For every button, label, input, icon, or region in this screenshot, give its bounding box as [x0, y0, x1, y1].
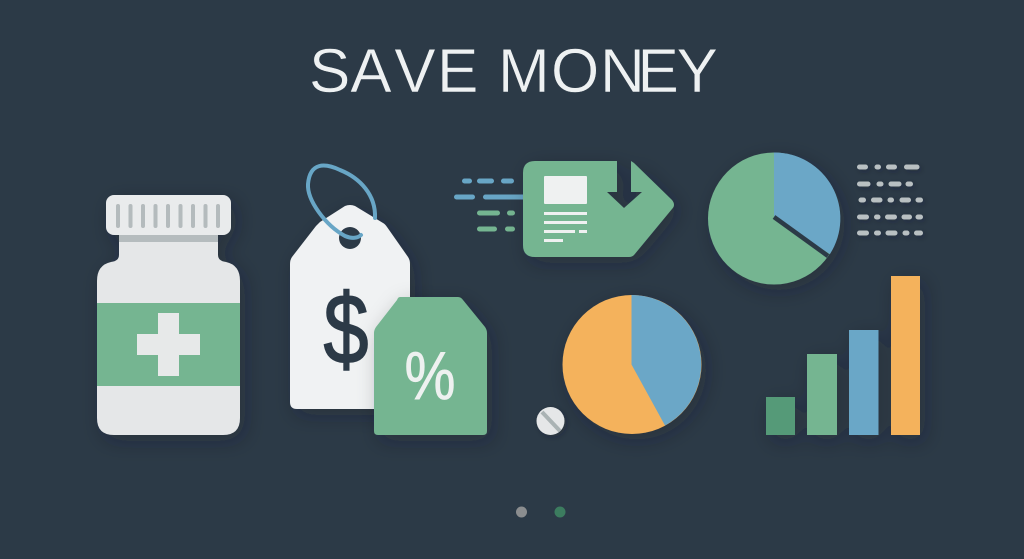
percent sign: % [404, 338, 456, 414]
green percent tag [374, 297, 487, 435]
document text lines [544, 212, 587, 242]
green label band [97, 303, 240, 386]
icon: pill [536, 407, 564, 435]
bottle body [97, 233, 240, 435]
pie chart: green and blue [708, 152, 840, 284]
pie chart: orange and blue [562, 295, 702, 434]
legend dashes [860, 167, 920, 233]
neck shadow [119, 235, 218, 242]
title: SAVE MONEY [309, 37, 718, 106]
slice divider [774, 217, 828, 256]
cap ridges [116, 204, 220, 228]
icon: price tags [290, 166, 487, 435]
bottle cap [106, 195, 231, 235]
speed dashes [456, 181, 525, 229]
bar chart [766, 276, 920, 435]
icon: document with down arrow [456, 161, 674, 257]
icon: medicine bottle [97, 195, 240, 435]
white dollar tag [290, 205, 410, 409]
dollar sign: $ [324, 273, 368, 384]
blue slice [632, 295, 701, 426]
tag hole [339, 227, 361, 249]
pagination dots [516, 506, 566, 518]
medical cross [137, 313, 200, 376]
document image block [544, 176, 587, 204]
green arrow card [523, 161, 674, 257]
blue slice [774, 152, 840, 254]
blue string loop [308, 166, 375, 238]
